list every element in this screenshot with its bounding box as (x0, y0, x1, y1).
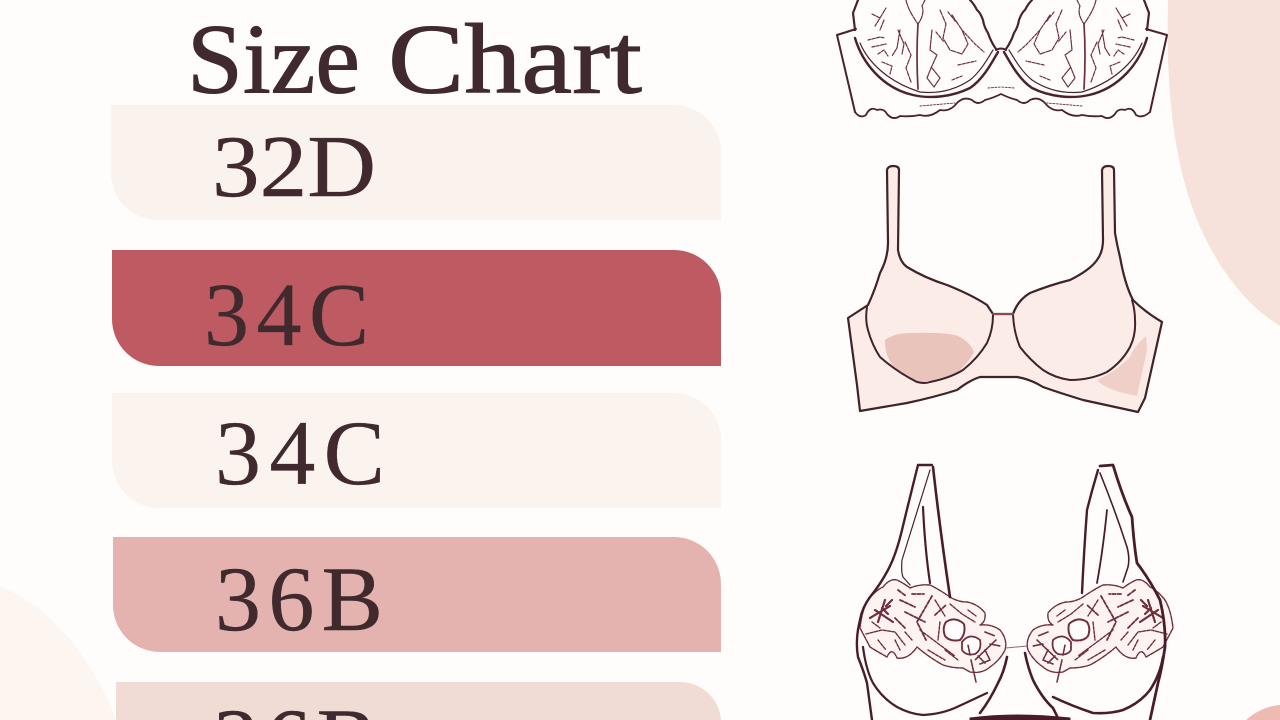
illustration: lace bra (837, 0, 1167, 118)
title: Chart (388, 4, 642, 114)
lace veins (868, 0, 1001, 106)
illustration: floral lace bra (857, 465, 1173, 720)
size row: 36B cut off (116, 682, 721, 720)
underwires (855, 38, 998, 97)
shadow on left cup (885, 333, 974, 382)
title (187, 4, 642, 114)
straps (857, 465, 932, 720)
underwires (863, 647, 987, 715)
size row: 36B: 36B (215, 548, 383, 650)
size row: 34C highlighted (112, 250, 721, 366)
band sides (837, 29, 856, 112)
size row: 34C (112, 393, 721, 508)
size row: 32D: 32D (212, 119, 376, 216)
illustration: plain blush bra (848, 166, 1162, 412)
title: Size (187, 4, 360, 114)
scalloped hem (855, 94, 1150, 118)
decorative blob: top right (1168, 0, 1280, 326)
lace left and right (860, 580, 1006, 682)
decorative blob: bottom left (0, 587, 116, 720)
size row: 34C highlighted: 34C (204, 266, 369, 365)
size row: 34C: 34C (215, 402, 385, 504)
center gore (970, 715, 1070, 720)
shadow on right band (1097, 336, 1147, 396)
decorative blob: bottom right (1246, 705, 1280, 720)
size row: 32D (111, 105, 721, 220)
cup seams (866, 307, 993, 383)
bra body (848, 166, 1162, 412)
size row: 36B (113, 537, 721, 652)
cup tops (853, 0, 858, 30)
